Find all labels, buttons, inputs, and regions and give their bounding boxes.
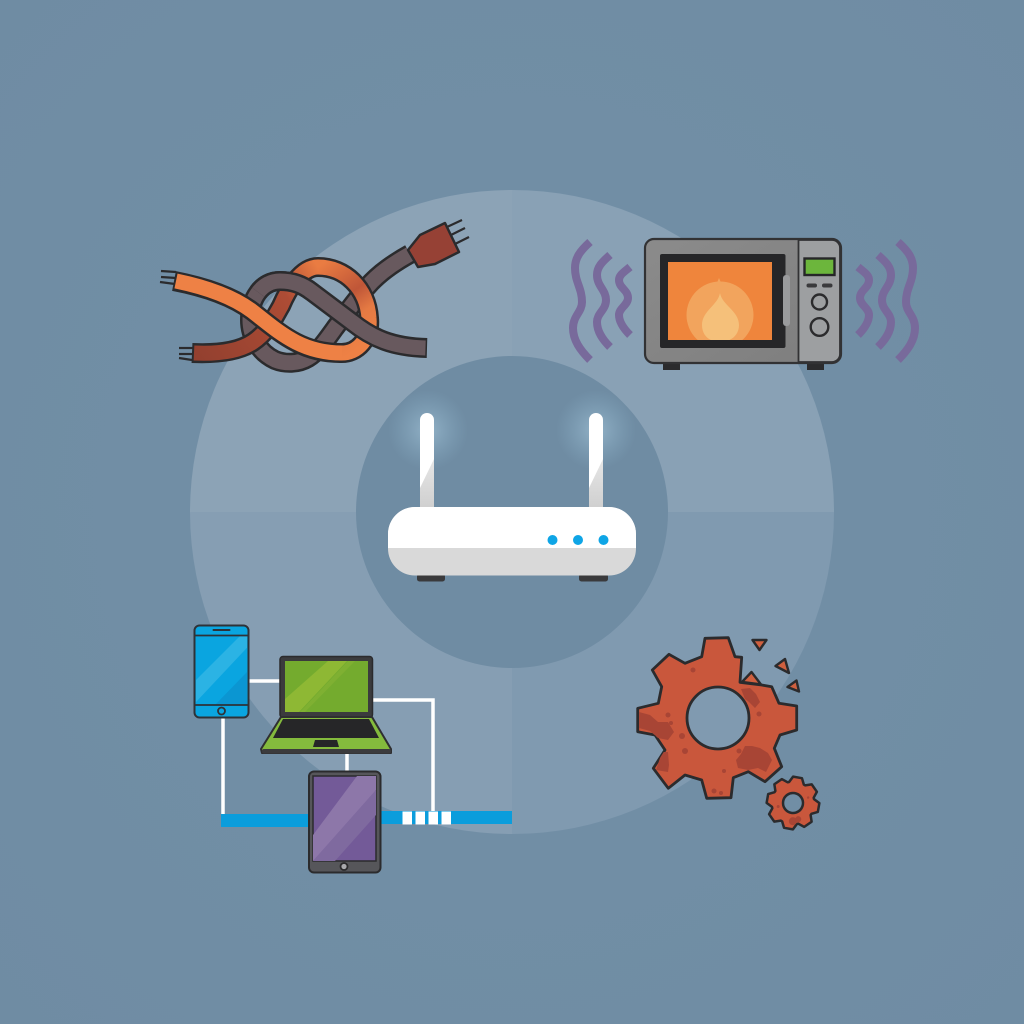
large gear — [638, 638, 797, 798]
router feet — [417, 574, 608, 582]
icon: connected devices — [194, 626, 512, 872]
center disc — [356, 356, 668, 668]
small gear — [763, 773, 823, 833]
icon: microwave waves — [573, 242, 915, 360]
left waves — [573, 242, 630, 360]
dark top strand — [258, 281, 427, 348]
router body — [388, 507, 636, 576]
plug prongs and wire ends — [160, 220, 469, 360]
door handle — [783, 275, 790, 326]
oven body — [645, 239, 841, 363]
icon: router — [388, 390, 636, 582]
oven interior — [668, 262, 772, 348]
control panel — [798, 240, 840, 362]
phone — [194, 626, 258, 718]
icon: tangled cable — [160, 220, 469, 363]
display — [804, 258, 834, 275]
icon: microwave oven — [645, 239, 841, 370]
icon: rusty gear — [638, 638, 823, 833]
feet — [663, 362, 824, 370]
laptop — [261, 656, 391, 754]
rust patches — [639, 668, 772, 795]
small gear rust — [774, 791, 810, 827]
status lights — [548, 535, 608, 545]
gear fragments — [742, 640, 799, 692]
plug — [408, 223, 459, 267]
quadrant ring — [190, 190, 834, 834]
orange strand — [174, 267, 369, 353]
rust and orange under strand — [192, 267, 318, 353]
antennas — [420, 413, 603, 509]
network lines — [223, 681, 433, 815]
small buttons — [806, 284, 832, 288]
knobs — [811, 294, 828, 336]
tablet — [309, 772, 380, 872]
door window — [660, 254, 786, 348]
dark strand — [250, 254, 410, 363]
antenna glow — [388, 390, 636, 470]
network bar — [221, 811, 512, 827]
right waves — [858, 242, 915, 360]
